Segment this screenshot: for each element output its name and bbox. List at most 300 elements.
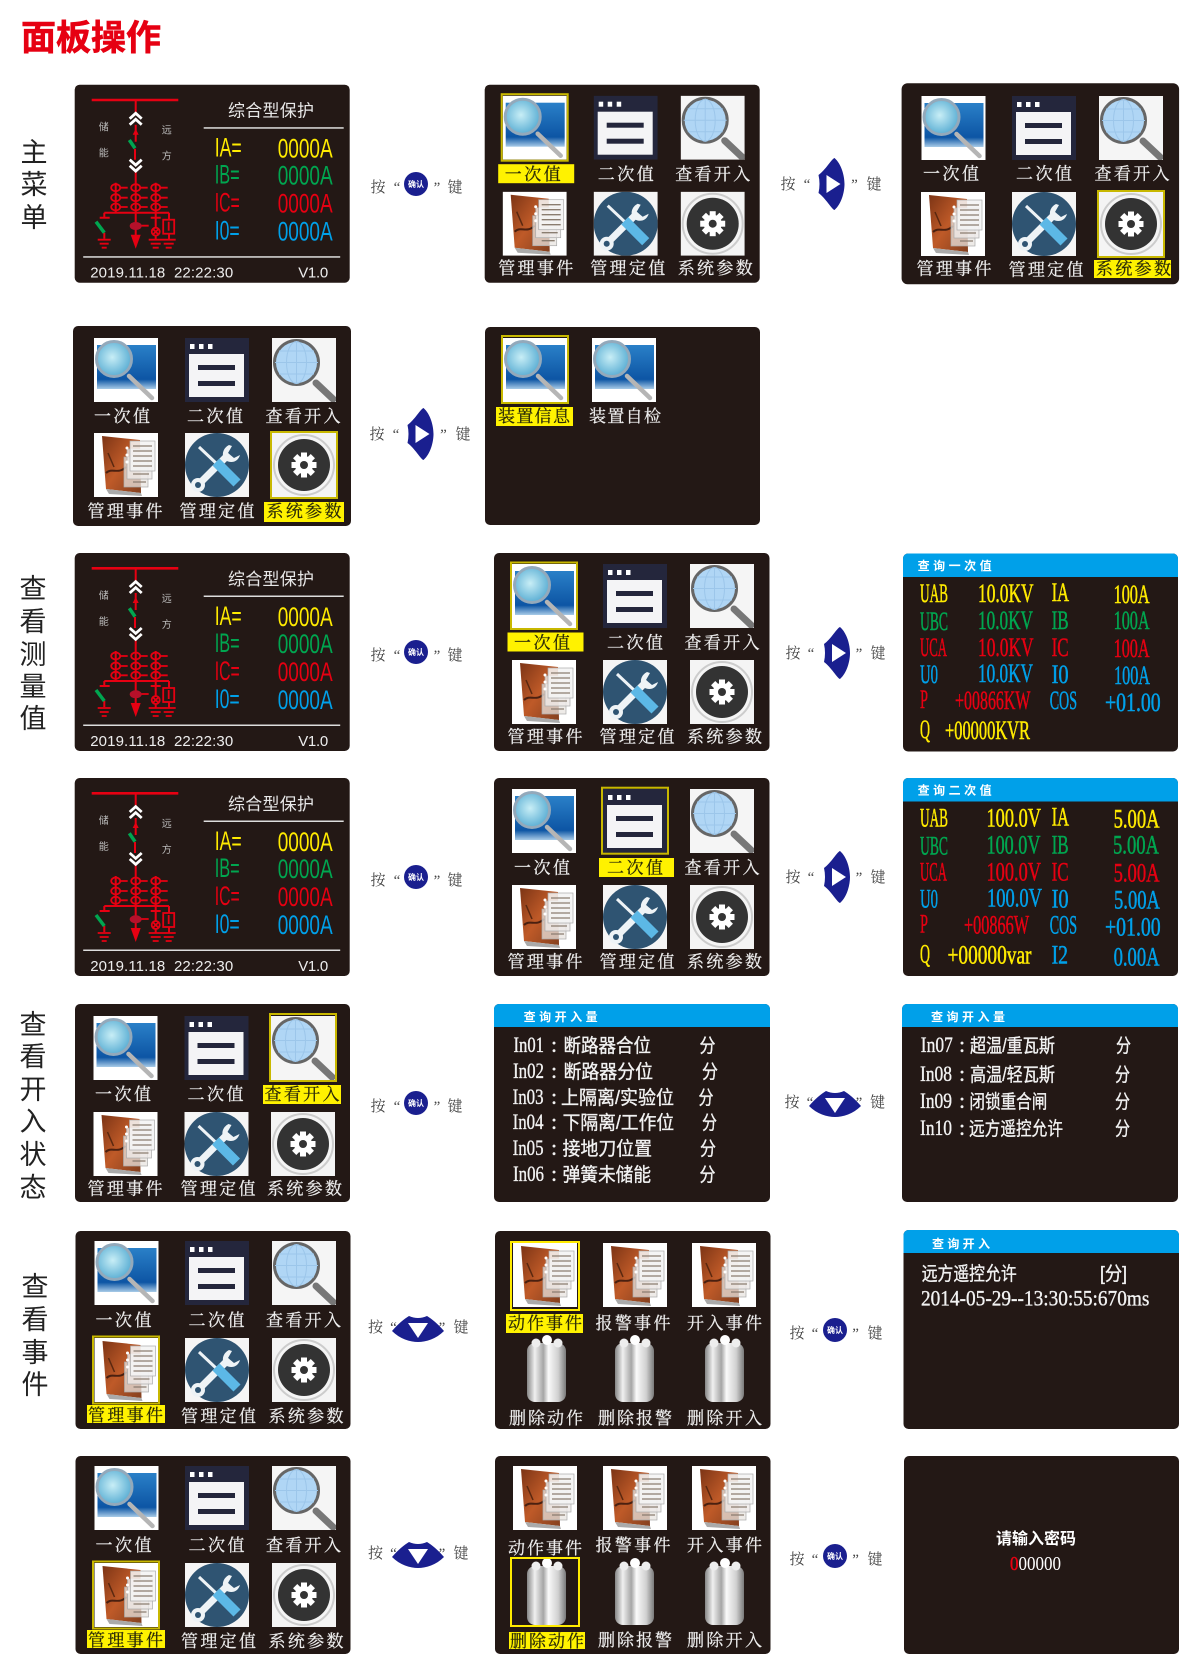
- down key prompt row 6: [368, 1316, 469, 1342]
- right key prompt row 1: [780, 158, 882, 210]
- panel: device info menu: [485, 327, 760, 525]
- status bar: [90, 733, 328, 750]
- panel header: [494, 1004, 770, 1027]
- readings table: 100A: [1114, 580, 1150, 609]
- current readings: 0000A: [278, 161, 333, 191]
- confirm key prompt row 5: “: [394, 1099, 401, 1115]
- confirm key prompt row 4: “: [394, 873, 401, 889]
- readings table: +01.00: [1105, 912, 1161, 942]
- section label: main menu: [20, 138, 48, 233]
- current readings: IA=: [215, 601, 242, 631]
- diagram labels: 远: [162, 593, 172, 605]
- readings table: Q: [920, 715, 930, 744]
- header title: 查询开入量: [931, 1009, 1005, 1024]
- current readings: 0000A: [278, 657, 333, 687]
- header title: 查询二次值: [918, 782, 992, 798]
- current readings: IC=: [215, 881, 240, 911]
- current readings: IA=: [215, 826, 242, 856]
- confirm key prompt row 6: ”: [852, 1326, 859, 1342]
- menu labels: [88, 1536, 344, 1651]
- current readings: IB=: [215, 853, 240, 883]
- section label: main menu: 菜: [20, 170, 48, 200]
- confirm key prompt row 7: ”: [852, 1552, 859, 1568]
- event labels: 动作事件: [508, 1314, 582, 1333]
- confirm key prompt row 3: 键: [447, 647, 463, 664]
- readings table: UAB: [920, 579, 948, 608]
- menu labels: [88, 1311, 344, 1426]
- menu labels: 查看开入: [684, 634, 760, 652]
- current readings: 0000A: [278, 854, 333, 884]
- input rows: :: [959, 1032, 965, 1057]
- menu labels: 查看开入: [266, 1536, 341, 1555]
- input rows: In10: [920, 1115, 952, 1140]
- menu labels: 系统参数: [687, 728, 762, 746]
- section label: view input state: 态: [20, 1173, 46, 1203]
- diagram labels: 方: [162, 843, 172, 856]
- current readings: 0000A: [278, 827, 333, 857]
- confirm key prompt row 1: 确认: [408, 179, 424, 189]
- readings table: 10.0KV: [978, 659, 1033, 688]
- readings table: [920, 578, 1161, 745]
- down key prompt row 7: ”: [439, 1546, 445, 1562]
- input rows: :: [959, 1115, 965, 1140]
- menu labels: 二次值: [188, 1536, 244, 1555]
- menu labels: 查看开入: [684, 858, 760, 878]
- readings table: I2: [1052, 940, 1068, 970]
- panel: password prompt: [904, 1456, 1179, 1654]
- panel: menu with primary value selected: [485, 85, 760, 283]
- confirm key prompt row 4: 确认: [408, 872, 424, 882]
- selection highlight: [263, 1014, 341, 1104]
- panel: secondary values: [903, 778, 1178, 976]
- diagram labels: 储: [99, 121, 109, 134]
- panel header: [903, 778, 1178, 802]
- down key prompt row 6: 按: [368, 1319, 384, 1336]
- event labels: 报警事件: [596, 1535, 670, 1555]
- menu labels: 二次值: [607, 858, 663, 878]
- header title: 查询开入: [932, 1236, 990, 1251]
- menu labels: 一次值: [514, 634, 570, 652]
- menu labels: 一次值: [96, 1311, 152, 1330]
- panel: input event detail: [904, 1230, 1179, 1429]
- confirm key prompt row 5: [370, 1091, 463, 1115]
- section label: view input state: 开: [20, 1075, 46, 1105]
- input rows: 分: [700, 1138, 716, 1160]
- menu labels: 二次值: [1016, 164, 1072, 184]
- readings table: 100A: [1114, 634, 1150, 663]
- diagram labels: 能: [99, 615, 109, 628]
- panel: menu row 7 with manage events selected: [76, 1456, 350, 1654]
- confirm key prompt row 5: 按: [370, 1098, 386, 1115]
- readings table: IB: [1052, 830, 1069, 860]
- input rows: 上隔离/实验位: [561, 1087, 674, 1109]
- confirm key prompt row 3: ”: [434, 648, 440, 664]
- readings table: +00866W: [964, 910, 1029, 940]
- confirm key prompt row 1: 键: [447, 179, 463, 196]
- readings table: +00000var: [948, 940, 1032, 970]
- section label: view measurements: 查: [20, 574, 46, 604]
- readings table: 10.0KV: [978, 579, 1034, 608]
- section label: view measurements: [20, 574, 46, 734]
- diagram labels: 能: [99, 840, 109, 853]
- menu labels: 管理事件: [88, 1631, 163, 1650]
- menu labels: 二次值: [188, 1311, 244, 1330]
- current readings: [215, 133, 333, 247]
- confirm key prompt row 6: 按: [789, 1325, 805, 1342]
- confirm key prompt row 6: [789, 1318, 883, 1342]
- menu icons: [512, 789, 754, 949]
- selection highlight: [1094, 191, 1171, 278]
- input rows: :: [959, 1061, 965, 1086]
- delete labels: 删除动作: [510, 1631, 584, 1651]
- down key prompt row 5: 按: [784, 1094, 800, 1111]
- panel: menu with system parameters selected: [902, 83, 1179, 284]
- down key prompt row 7: 键: [453, 1545, 469, 1562]
- down key prompt row 6: “: [390, 1320, 397, 1336]
- right key prompt row 3: ”: [856, 646, 862, 662]
- password digits: 000000: [1010, 1553, 1061, 1575]
- diagram labels: 方: [162, 150, 172, 163]
- input rows: 分: [1115, 1091, 1130, 1113]
- menu labels: 系统参数: [678, 259, 753, 278]
- menu labels: [508, 634, 762, 746]
- input rows: 分: [700, 1164, 716, 1186]
- menu labels: 系统参数: [266, 502, 342, 521]
- status bar: 2019.11.18 22:22:30: [90, 958, 233, 975]
- input rows: :: [551, 1135, 557, 1160]
- right key prompt row 4: “: [808, 870, 815, 886]
- menu labels: 管理定值: [181, 1407, 256, 1426]
- right key prompt row 1: ”: [851, 177, 858, 193]
- device labels: [498, 407, 661, 426]
- menu labels: 查看开入: [266, 1311, 341, 1330]
- input rows: In03: [513, 1084, 544, 1109]
- confirm key prompt row 1: “: [394, 180, 401, 196]
- event labels: 动作事件: [508, 1539, 582, 1558]
- readings table: 5.00A: [1114, 886, 1160, 914]
- event labels: 开入事件: [687, 1314, 762, 1333]
- right key prompt row 1: “: [804, 177, 811, 193]
- diagram labels: [99, 121, 172, 163]
- delete labels: [510, 1630, 762, 1651]
- down key prompt row 6: ”: [439, 1320, 445, 1336]
- right key prompt row 2: “: [393, 427, 400, 443]
- input rows: :: [551, 1058, 557, 1083]
- menu labels: 管理定值: [180, 1180, 256, 1198]
- readings table: IA: [1052, 802, 1069, 832]
- menu labels: 查看开入: [675, 165, 750, 184]
- panel: main screen row 4: [75, 778, 350, 976]
- selection highlight: [264, 432, 344, 522]
- down key prompt row 7: “: [390, 1546, 397, 1562]
- menu labels: 系统参数: [268, 1632, 344, 1651]
- right key prompt row 2: ”: [440, 427, 447, 443]
- current readings: 0000A: [278, 882, 333, 912]
- right key prompt row 2: 键: [455, 426, 471, 443]
- readings table: Q: [920, 940, 930, 968]
- status bar: [90, 958, 328, 975]
- readings table: 100.0V: [987, 884, 1042, 912]
- diagram labels: 远: [162, 818, 172, 830]
- status bar: 2019.11.18 22:22:30: [90, 733, 233, 750]
- diagram labels: 储: [99, 814, 109, 827]
- right key prompt row 4: ”: [856, 870, 862, 886]
- menu labels: 管理事件: [88, 1406, 163, 1425]
- menu labels: 一次值: [505, 165, 561, 184]
- confirm key prompt row 7: 按: [789, 1551, 805, 1568]
- readings table: 5.00A: [1114, 858, 1160, 888]
- delete labels: 删除动作: [509, 1408, 583, 1428]
- current readings: I0=: [215, 684, 240, 714]
- readings table: IC: [1052, 858, 1069, 886]
- menu labels: 管理定值: [600, 952, 674, 972]
- readings table: [920, 802, 1161, 972]
- readings table: U0: [920, 884, 938, 914]
- section label: view input state: [20, 1010, 46, 1203]
- device labels: 装置信息: [498, 407, 571, 426]
- single line diagram: [92, 793, 178, 942]
- menu labels: 一次值: [94, 407, 150, 426]
- readings table: UAB: [920, 804, 948, 832]
- current readings: IB=: [215, 628, 240, 658]
- section label: view measurements: 看: [20, 607, 46, 637]
- input rows: :: [551, 1084, 557, 1109]
- diagram labels: 储: [99, 589, 109, 602]
- diagram labels: 远: [162, 125, 172, 137]
- input rows: 分: [702, 1061, 718, 1083]
- password heading: 请输入密码: [996, 1529, 1076, 1548]
- input rows: 远方遥控允许: [969, 1118, 1063, 1140]
- menu labels: 二次值: [187, 407, 243, 426]
- down key prompt row 6: 键: [453, 1319, 469, 1336]
- menu labels: [88, 407, 342, 521]
- input rows: :: [551, 1032, 557, 1057]
- menu labels: 一次值: [95, 1085, 151, 1104]
- current readings: IB=: [215, 160, 240, 190]
- input rows: In08: [920, 1061, 952, 1086]
- menu labels: 管理定值: [600, 728, 674, 746]
- selection highlight: [496, 336, 573, 426]
- status bar: V1.0: [298, 958, 328, 975]
- menu labels: [508, 858, 762, 972]
- right key prompt row 2: 按: [369, 426, 385, 443]
- menu labels: 管理事件: [88, 1180, 162, 1198]
- input rows: In01: [514, 1032, 544, 1057]
- readings table: UBC: [920, 832, 948, 860]
- input rows: 闭锁重合闸: [969, 1091, 1047, 1113]
- menu labels: 管理定值: [181, 1632, 256, 1651]
- confirm key prompt row 7: 键: [867, 1551, 883, 1568]
- menu labels: 管理事件: [88, 502, 162, 521]
- selection highlight: [87, 1336, 165, 1423]
- section label: main menu: 单: [20, 203, 48, 233]
- menu labels: 系统参数: [1096, 260, 1171, 278]
- panel header: [904, 1230, 1179, 1253]
- readings table: 10.0KV: [978, 633, 1034, 662]
- readings table: UCA: [920, 633, 947, 662]
- input rows: 分: [702, 1112, 717, 1134]
- readings table: 100.0V: [986, 804, 1041, 832]
- right key prompt row 3: “: [808, 646, 815, 662]
- menu icons: [94, 1016, 335, 1176]
- status bar: 2019.11.18 22:22:30: [90, 265, 233, 282]
- event icons: [513, 1466, 756, 1530]
- section label: view input state: 状: [20, 1140, 46, 1170]
- input rows: 断路器合位: [564, 1035, 651, 1057]
- confirm key prompt row 1: ”: [434, 180, 440, 196]
- menu labels: 管理事件: [508, 952, 582, 972]
- input rows: 分: [698, 1087, 714, 1109]
- single line diagram: [92, 100, 178, 249]
- menu labels: 管理事件: [916, 260, 992, 278]
- confirm key prompt row 5: 确认: [408, 1098, 424, 1108]
- readings table: U0: [920, 660, 938, 689]
- readings table: 5.00A: [1114, 804, 1160, 834]
- menu labels: 二次值: [598, 165, 654, 184]
- panel: main screen row 3: [75, 553, 350, 751]
- current readings: 0000A: [278, 685, 333, 715]
- input rows: 分: [1116, 1035, 1131, 1057]
- down key prompt row 7: 按: [368, 1545, 384, 1562]
- current readings: I0=: [215, 909, 240, 939]
- confirm key prompt row 3: 按: [370, 647, 386, 664]
- confirm key prompt row 3: [370, 640, 463, 664]
- input rows: 弹簧未储能: [563, 1164, 651, 1186]
- panel header: [902, 1004, 1178, 1027]
- readings table: +01.00: [1105, 688, 1161, 717]
- current readings: IA=: [215, 133, 242, 163]
- screen heading: 综合型保护: [228, 570, 314, 589]
- menu labels: 管理事件: [498, 259, 573, 278]
- diagram labels: [99, 589, 172, 631]
- input rows: :: [551, 1161, 557, 1186]
- selection highlight: [87, 1562, 165, 1648]
- event state: [分]: [1100, 1263, 1127, 1285]
- input rows: In07: [921, 1032, 953, 1057]
- readings table: IB: [1052, 606, 1069, 635]
- menu labels: [916, 164, 1171, 280]
- delete labels: [509, 1408, 762, 1428]
- right key prompt row 4: 按: [785, 869, 801, 886]
- section label: view events: 看: [22, 1305, 48, 1335]
- down key prompt row 5: 键: [870, 1094, 885, 1111]
- readings table: +00866KW: [955, 686, 1031, 715]
- delete icons: [527, 1335, 744, 1402]
- section label: view measurements: 测: [20, 640, 46, 670]
- right key prompt row 4: 键: [870, 869, 886, 886]
- input rows: :: [551, 1109, 557, 1134]
- diagram labels: 方: [162, 618, 172, 631]
- panel: event menu with action events selected: [495, 1231, 770, 1429]
- title: 面板操作: [21, 19, 161, 58]
- input rows: In09: [920, 1088, 952, 1113]
- menu labels: 查看开入: [266, 407, 340, 426]
- confirm key prompt row 4: 键: [447, 872, 463, 889]
- panel: menu row 3 with primary value selected: [494, 553, 770, 751]
- menu labels: 管理定值: [180, 502, 254, 521]
- selection highlight: [506, 1242, 583, 1333]
- confirm key prompt row 3: “: [394, 648, 401, 664]
- menu labels: 二次值: [188, 1085, 244, 1104]
- menu labels: [88, 1085, 342, 1198]
- right key prompt row 4: [785, 851, 886, 903]
- status bar: V1.0: [298, 265, 328, 282]
- readings table: I0: [1052, 884, 1069, 914]
- menu labels: 查看开入: [1094, 164, 1170, 184]
- confirm key prompt row 6: “: [812, 1326, 819, 1342]
- panel: input list 2: [902, 1004, 1178, 1202]
- right key prompt row 3: [785, 627, 886, 679]
- menu labels: 一次值: [514, 858, 570, 878]
- confirm key prompt row 7: 确认: [827, 1551, 843, 1561]
- input rows: 分: [700, 1035, 716, 1057]
- input rows: 分: [1115, 1118, 1130, 1140]
- right key prompt row 3: 按: [785, 645, 801, 662]
- screen heading: 综合型保护: [228, 795, 314, 814]
- input rows: [920, 1032, 1131, 1140]
- menu icons: [94, 1241, 336, 1402]
- current readings: 0000A: [278, 189, 333, 219]
- menu labels: [498, 165, 753, 278]
- readings table: P: [920, 910, 928, 938]
- current readings: 0000A: [278, 629, 333, 659]
- input rows: [513, 1032, 718, 1186]
- down key prompt row 5: ”: [856, 1095, 862, 1111]
- menu labels: 管理定值: [590, 259, 665, 278]
- panel: menu row 4 with secondary value selected: [494, 778, 770, 976]
- selection highlight: [498, 94, 574, 183]
- selection highlight: [509, 1558, 585, 1649]
- menu labels: 查看开入: [264, 1085, 340, 1104]
- readings table: 0.00A: [1114, 942, 1160, 972]
- readings table: IA: [1052, 578, 1069, 607]
- menu icons: [94, 1466, 336, 1627]
- current readings: 0000A: [278, 217, 333, 247]
- delete labels: 删除开入: [687, 1408, 762, 1428]
- readings table: UCA: [920, 858, 947, 886]
- readings table: COS: [1050, 686, 1077, 715]
- section label: view input state: 入: [20, 1107, 46, 1137]
- section label: view input state: 查: [20, 1010, 46, 1040]
- confirm key prompt row 4: [370, 865, 463, 889]
- section label: view events: 事: [22, 1338, 48, 1368]
- down key prompt row 5: “: [807, 1095, 814, 1111]
- confirm key prompt row 1: [370, 172, 463, 196]
- menu labels: 管理定值: [1008, 260, 1084, 280]
- section label: view events: [22, 1272, 48, 1400]
- current readings: I0=: [215, 216, 240, 246]
- event labels: 开入事件: [687, 1536, 762, 1555]
- menu icons: [921, 96, 1163, 256]
- event name: 远方遥控允许: [922, 1263, 1017, 1285]
- event labels: [508, 1535, 762, 1558]
- input rows: In04: [513, 1109, 544, 1134]
- delete labels: 删除开入: [687, 1630, 762, 1650]
- section label: view events: 查: [22, 1272, 48, 1302]
- confirm key prompt row 1: 按: [370, 179, 386, 196]
- readings table: 100A: [1114, 661, 1150, 690]
- device icons: [503, 338, 656, 402]
- menu icons: [512, 564, 754, 724]
- section label: main menu: 主: [20, 138, 48, 168]
- readings table: IC: [1052, 633, 1069, 662]
- menu labels: 一次值: [923, 164, 979, 184]
- readings table: +00000KVR: [945, 716, 1030, 745]
- menu icons: [94, 338, 336, 497]
- panel: menu row 5 with view input selected: [75, 1004, 350, 1202]
- header title: 查询一次值: [918, 558, 992, 573]
- right key prompt row 3: 键: [870, 645, 886, 662]
